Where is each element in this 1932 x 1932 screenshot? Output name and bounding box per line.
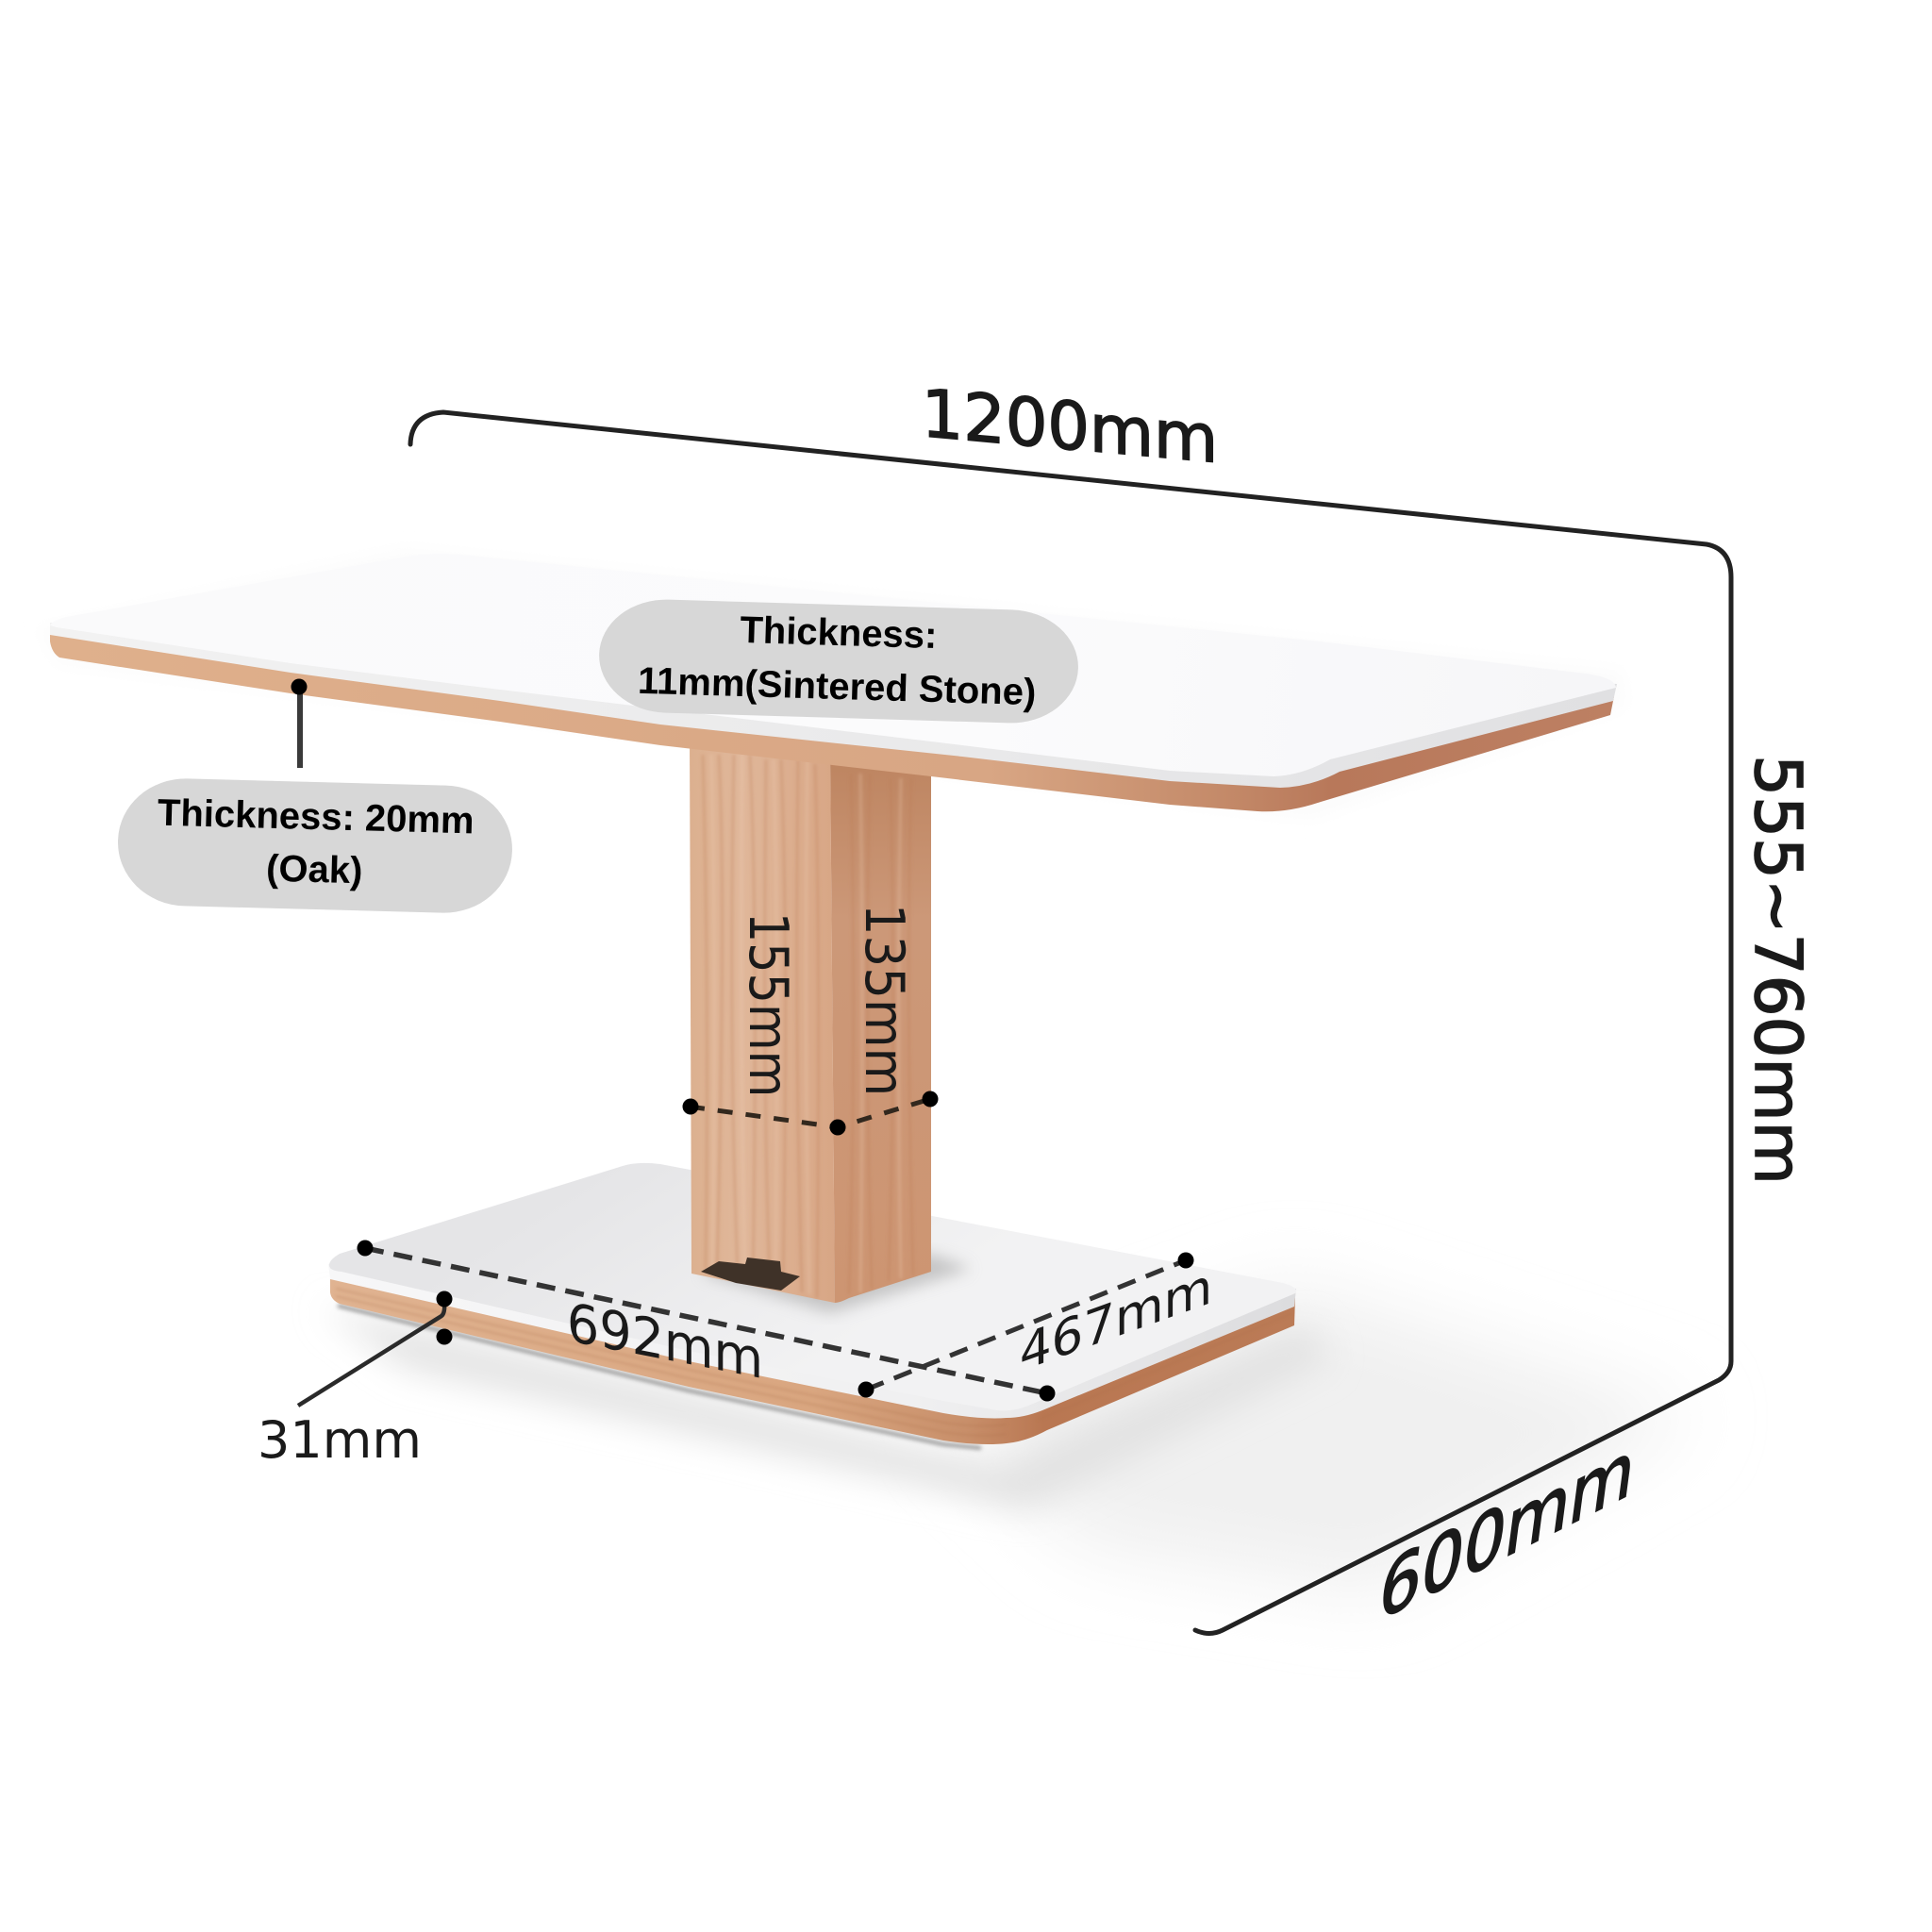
oak pill line 2: (Oak) <box>266 848 363 891</box>
pill line 2: 11mm(Sintered Stone) <box>638 660 1037 713</box>
post: floor bracket <box>701 1257 800 1291</box>
post: left face <box>690 736 835 1303</box>
post measure: dashed lines <box>683 1091 938 1136</box>
table top <box>50 554 1617 811</box>
label: 555~760mm height: 555~760mm <box>1740 755 1815 1185</box>
post: shadow on base <box>703 1255 972 1313</box>
label: 467mm: 467mm <box>1020 1256 1212 1383</box>
base measure: 31mm pointer <box>298 1291 453 1406</box>
label: 31mm (left edge clipped): 31mm <box>258 1410 422 1470</box>
table halo <box>38 547 1627 821</box>
infographic: table dimensions <box>50 389 1805 1636</box>
pedestal post <box>690 736 972 1313</box>
label: 1200mm width: 1200mm <box>922 375 1218 478</box>
label: 600mm depth: 600mm <box>1374 1421 1641 1641</box>
base measure: 467mm dashed line <box>858 1253 1194 1398</box>
pointer: oak thickness <box>291 679 308 768</box>
top: stone surface <box>50 554 1616 776</box>
label: 155mm: 155mm <box>737 912 800 1097</box>
base measure: 692mm dashed line <box>357 1240 1055 1402</box>
label: 692mm: 692mm <box>567 1291 763 1391</box>
base: wood laminate lines <box>336 1289 1292 1436</box>
pill line 1: Thickness: <box>740 609 938 657</box>
base: oak layer <box>330 1274 1295 1444</box>
floor shadow <box>321 1283 1698 1594</box>
callout: oak thickness <box>116 777 514 914</box>
post: wood grain <box>703 755 913 1298</box>
dimension bracket line <box>410 412 1731 1634</box>
callout: stone thickness <box>597 597 1080 725</box>
oak pill background <box>116 777 514 914</box>
top: oak layer <box>50 630 1614 811</box>
pill background <box>597 597 1080 725</box>
base plate <box>328 1163 1296 1444</box>
base: stone edge <box>328 1264 1296 1418</box>
top: stone edge <box>50 623 1617 788</box>
oak pill line 1: Thickness: 20mm <box>157 792 475 841</box>
base: stone top face <box>329 1163 1296 1410</box>
label: 135mm: 135mm <box>852 904 915 1096</box>
post: right face <box>830 755 931 1303</box>
